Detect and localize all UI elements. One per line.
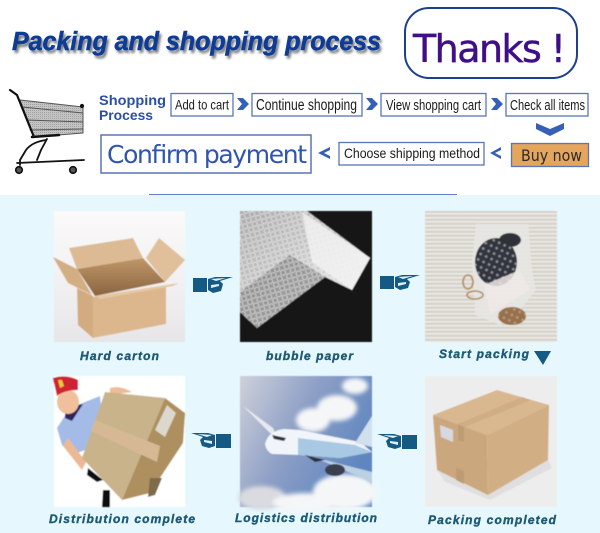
step: buy now: Buy now	[521, 146, 582, 165]
light blue background panel	[0, 195, 600, 533]
photo: hard carton	[53, 211, 185, 342]
icon: pointing hand 1	[193, 277, 233, 293]
caption: bubble paper: bubble paper	[266, 349, 354, 363]
step: choose shipping method: Choose shipping method	[344, 145, 480, 161]
caption: logistics distribution: Logistics distribution	[235, 511, 377, 525]
icon: pointing hand 2	[380, 275, 420, 290]
thanks badge	[405, 8, 577, 78]
icon: down triangle	[534, 351, 551, 365]
heading: shopping process: Process	[99, 107, 153, 123]
icon: pointing hand 4	[377, 434, 417, 449]
step: view shopping cart	[381, 94, 486, 116]
caption: hard carton: Hard carton	[80, 349, 159, 363]
step: continue shopping	[252, 94, 362, 116]
step: continue shopping: Continue shopping	[256, 97, 357, 114]
arrow: to view shopping cart	[366, 98, 378, 110]
step: choose shipping method	[339, 142, 484, 165]
icon: pointing hand 3	[191, 433, 231, 448]
thanks badge: Thanks !	[412, 27, 566, 71]
step: add to cart	[171, 94, 233, 116]
photo: bubble paper	[240, 211, 372, 342]
step: view shopping cart: View shopping cart	[386, 97, 482, 114]
arrow: to confirm payment	[318, 147, 330, 159]
arrow: to continue shopping	[237, 98, 249, 110]
title: Packing and shopping process	[12, 28, 381, 56]
step: add to cart: Add to cart	[175, 96, 229, 112]
divider line	[149, 194, 457, 195]
caption: start packing: Start packing	[439, 347, 530, 361]
photo: start packing	[425, 211, 557, 342]
photo: courier with box	[53, 376, 185, 507]
arrow: to choose shipping method	[490, 147, 501, 159]
heading: shopping process: Shopping	[99, 92, 166, 108]
heading: shopping process	[99, 92, 166, 123]
step: check all items	[506, 94, 588, 116]
photo: airplane in sky	[238, 376, 377, 513]
icon: shopping cart	[10, 90, 84, 173]
arrow: to check all items	[491, 98, 503, 110]
caption: packing completed: Packing completed	[428, 513, 557, 527]
caption: distribution complete: Distribution complete	[49, 512, 195, 526]
arrow: down to buy now	[536, 123, 564, 136]
title: Packing and shopping process	[14, 31, 383, 59]
photo: sealed box	[425, 376, 557, 507]
step: confirm payment: Confirm payment	[107, 140, 307, 169]
